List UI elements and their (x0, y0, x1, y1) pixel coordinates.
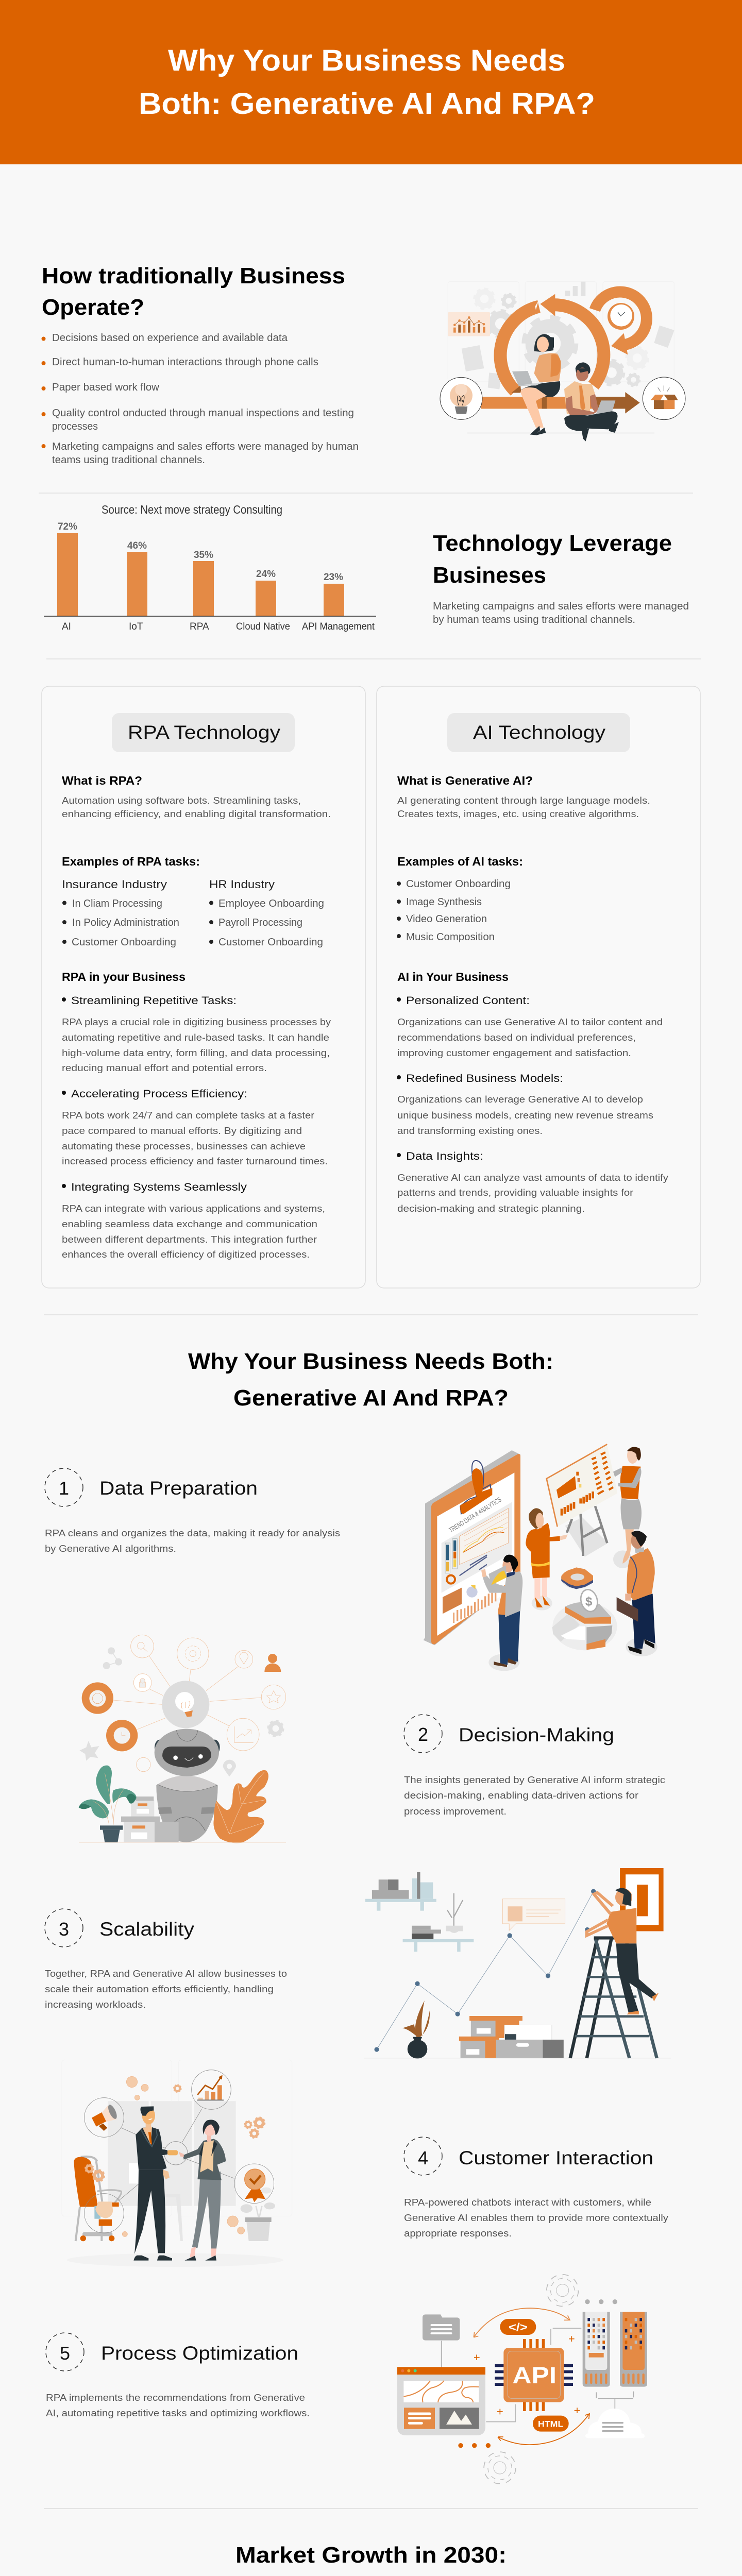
illustration: man on ladder plotting growth (364, 1868, 671, 2059)
clipboard: TREND DATA & ANALYTICS (448, 1496, 503, 1534)
plant pot (241, 2188, 275, 2241)
code pill (500, 2319, 536, 2335)
panel: RPA technology (42, 686, 365, 1288)
RPA in your business (62, 970, 331, 1260)
panel title (447, 713, 630, 752)
RPA in your business: RPA plays a crucial role in digitizing business processes by (62, 1016, 331, 1027)
AI in your business: Generative AI can analyze vast amounts of data to identify (397, 1172, 669, 1183)
number badge (404, 2137, 442, 2175)
examples of AI tasks: Music Composition (406, 931, 495, 943)
standing man with briefcase (617, 1531, 657, 1656)
standing woman centre (526, 1508, 568, 1611)
badge circle: growth chart (192, 2070, 231, 2109)
section: how traditionally business operate (41, 263, 685, 466)
API chip: API (512, 2362, 556, 2388)
badge circle: megaphone (85, 2098, 124, 2137)
paragraph: Marketing campaigns and sales efforts were managed (433, 601, 689, 612)
what is RPA: What is RPA? (62, 774, 142, 787)
panel: AI technology (377, 686, 700, 1288)
line chart (374, 1889, 596, 2052)
chart source: Source: Next move strategy Consulting (102, 503, 282, 516)
step 3: scalability (45, 1909, 287, 2010)
examples of RPA tasks: Examples of RPA tasks: (62, 855, 200, 868)
AI in your business: AI in Your Business (397, 970, 509, 984)
step text (45, 1968, 287, 2010)
RPA in your business: automating repetitive and rule-based tasks. It can handle (62, 1032, 329, 1043)
RPA in your business: Streamlining Repetitive Tasks: (71, 995, 237, 1007)
step text: appropriate responses. (404, 2228, 512, 2239)
number badge (46, 2333, 84, 2371)
step heading: Scalability (99, 1919, 195, 1940)
value labels: 35% (194, 550, 213, 561)
heading: Busineses (433, 563, 546, 588)
ladder and man (570, 1888, 659, 2058)
panel title (112, 713, 295, 752)
AI in your business: Organizations can use Generative AI to tailor content and (397, 1016, 663, 1027)
step text: process improvement. (404, 1806, 507, 1817)
examples of RPA tasks: Payroll Processing (218, 917, 302, 928)
icon: light bulb (440, 377, 482, 419)
connector lines (119, 2109, 234, 2201)
AI in your business: patterns and trends, providing valuable insights for (397, 1187, 633, 1198)
AI in your business: Data Insights: (406, 1150, 483, 1162)
what is RPA: enhancing efficiency, and enabling digital transformation. (62, 808, 331, 819)
examples of AI tasks: Examples of AI tasks: (397, 855, 523, 868)
heading: market growth: Market Growth in 2030: (235, 2543, 507, 2568)
AI in your business: Organizations can leverage Generative AI to develop (397, 1094, 643, 1105)
section: technology leverage businesses (433, 531, 689, 625)
title: Both: Generative AI And RPA? (139, 87, 595, 121)
gear and pie chart: $ (585, 1595, 592, 1609)
what is generative AI: Creates texts, images, etc. using creative algorithms. (397, 808, 639, 819)
step text: RPA implements the recommendations from Generative (46, 2392, 305, 2403)
AI in your business: and transforming existing ones. (397, 1125, 543, 1136)
panel title: RPA Technology (128, 722, 281, 743)
value labels: 23% (324, 572, 343, 583)
plant (79, 1766, 137, 1842)
AI in your business: improving customer engagement and satisfaction. (397, 1047, 631, 1058)
panel title: AI Technology (473, 722, 606, 743)
examples of AI tasks: Customer Onboarding (406, 878, 511, 890)
RPA in your business: between different departments. This integration further (62, 1234, 317, 1245)
RPA in your business: Accelerating Process Efficiency: (71, 1088, 247, 1100)
standing man at board (481, 1555, 522, 1671)
AI in your business: Redefined Business Models: (406, 1073, 563, 1084)
step text: decision-making, enabling data-driven actions for (404, 1790, 638, 1801)
step 1: data preparation (45, 1468, 340, 1554)
step text: AI, automating repetitive tasks and optimizing workflows. (46, 2408, 310, 2418)
step text: Together, RPA and Generative AI allow businesses to (45, 1968, 287, 1979)
heading: why your business needs both (188, 1349, 553, 1411)
server racks (583, 2312, 647, 2387)
what is generative AI: What is Generative AI? (397, 774, 533, 787)
AI in your business: unique business models, creating new revenue streams (397, 1110, 653, 1121)
AI in your business: decision-making and strategic planning. (397, 1203, 585, 1214)
bullet list: Decisions based on experience and available data (52, 332, 288, 344)
RPA in your business: RPA in your Business (62, 970, 185, 984)
clipboard (424, 1450, 520, 1645)
RPA in your business: RPA bots work 24/7 and can complete tasks at a faster (62, 1110, 314, 1121)
frame (620, 1868, 664, 1931)
AI in your business: Personalized Content: (406, 995, 530, 1007)
folder icon (423, 2314, 460, 2341)
badge circle: fist (85, 2194, 124, 2233)
illustration: robot with idea network (79, 1635, 286, 1843)
step text (46, 2392, 310, 2418)
value labels: 24% (256, 569, 276, 580)
AI in your business: recommendations based on individual preferences, (397, 1032, 636, 1043)
heading: why your business needs both: Generative AI And RPA? (233, 1385, 509, 1411)
value labels: 72% (58, 521, 77, 532)
examples of AI tasks (397, 855, 523, 943)
speech box (502, 1899, 565, 1930)
bullet list: Paper based work flow (52, 382, 160, 393)
standing woman right (613, 1447, 642, 1568)
step heading: Process Optimization (101, 2343, 298, 2364)
html pill: HTML (538, 2419, 563, 2429)
what is RPA (62, 774, 331, 819)
browser window (397, 2367, 485, 2435)
RPA in your business: enhances the overall efficiency of digitized processes. (62, 1249, 310, 1260)
examples of AI tasks: Image Synthesis (406, 896, 482, 908)
paragraph: by human teams using traditional channels. (433, 614, 635, 625)
step 5: process optimization (46, 2333, 310, 2418)
illustration: API hub (397, 2277, 647, 2482)
value labels: 46% (127, 540, 147, 551)
plus signs (474, 2336, 580, 2414)
number badge: 1 (59, 1478, 69, 1499)
woman with laptop (512, 334, 561, 435)
API chip (495, 2339, 573, 2411)
header banner (0, 0, 742, 164)
examples of AI tasks: Video Generation (406, 913, 487, 925)
what is generative AI: AI generating content through large language models. (397, 795, 650, 806)
outline gears (486, 2277, 576, 2482)
bars (57, 533, 344, 616)
RPA in your business: high-volume data entry, form filling, and data processing, (62, 1047, 330, 1058)
flow arrows (474, 2308, 589, 2445)
step 2: decision-making (404, 1715, 665, 1817)
step text: The insights generated by Generative AI inform strategic (404, 1774, 665, 1785)
step text: RPA-powered chatbots interact with customers, while (404, 2197, 651, 2208)
office chair (74, 2157, 122, 2241)
examples of RPA tasks: In Cliam Processing (72, 898, 162, 909)
examples of RPA tasks: In Policy Administration (72, 917, 179, 928)
title (139, 44, 595, 121)
icon: open box (643, 377, 685, 420)
examples of RPA tasks (62, 855, 324, 948)
category labels: API Management (302, 621, 375, 632)
step text (404, 2197, 669, 2239)
step text: RPA cleans and organizes the data, making it ready for analysis (45, 1528, 340, 1538)
step text (45, 1528, 340, 1554)
bullet list: Marketing campaigns and sales efforts were managed by human (52, 441, 359, 452)
category labels: IoT (129, 621, 143, 632)
coins (122, 2076, 245, 2236)
what is generative AI (397, 774, 650, 819)
value labels (58, 521, 343, 583)
code pill: </> (509, 2320, 528, 2333)
cloud icon (585, 2409, 645, 2438)
heading (433, 531, 672, 588)
step heading: Data Preparation (99, 1478, 258, 1499)
bar chart: technology adoption (44, 503, 376, 632)
man in suit (133, 2106, 178, 2261)
step text (404, 1774, 665, 1817)
number badge (45, 1468, 83, 1506)
RPA in your business: increased process efficiency and faster turnaround times. (62, 1156, 328, 1166)
RPA in your business: enabling seamless data exchange and communication (62, 1218, 317, 1229)
man with laptop (564, 362, 619, 442)
category labels: RPA (190, 621, 209, 632)
illustration: workflow cycle with two people (440, 282, 685, 442)
RPA in your business: Integrating Systems Seamlessly (71, 1181, 247, 1193)
AI in your business (397, 970, 669, 1214)
bullet list: Quality control onducted through manual inspections and testing (52, 408, 354, 419)
heading: How traditionally Business (42, 263, 345, 289)
examples of RPA tasks: Employee Onboarding (218, 898, 324, 909)
number badge: 3 (59, 1919, 69, 1940)
category labels: AI (62, 621, 71, 632)
connectors (442, 2328, 633, 2422)
step text: by Generative AI algorithms. (45, 1543, 176, 1554)
shelves (365, 1872, 474, 1952)
heading (42, 263, 345, 320)
examples of RPA tasks: Customer Onboarding (218, 937, 323, 948)
number badge: 4 (418, 2147, 428, 2168)
title: Why Your Business Needs (168, 44, 565, 77)
number badge (404, 1715, 442, 1753)
bullet list: Direct human-to-human interactions through phone calls (52, 357, 318, 368)
category labels (62, 621, 375, 632)
orange rings and person icon (82, 1654, 281, 1751)
examples of RPA tasks: HR Industry (209, 878, 275, 891)
number badge: 5 (60, 2343, 70, 2364)
number badge: 2 (418, 1724, 428, 1745)
step text: Generative AI enables them to provide more contextually (404, 2212, 669, 2223)
RPA in your business: pace compared to manual efforts. By digitizing and (62, 1125, 302, 1136)
storage boxes (459, 2016, 564, 2058)
boxes (121, 1797, 179, 1842)
step heading: Customer Interaction (459, 2147, 653, 2168)
illustration: isometric analytics clipboard team (424, 1444, 657, 1671)
presenter board (547, 1444, 617, 1557)
html pill (533, 2416, 569, 2432)
orange leaf (213, 1770, 268, 1843)
step text: increasing workloads. (45, 1999, 146, 2010)
category labels: Cloud Native (236, 621, 290, 632)
grey icons (79, 1647, 236, 1776)
woman in suit (179, 2120, 226, 2261)
examples of RPA tasks: Insurance Industry (62, 878, 167, 891)
badge circle: award (234, 2164, 274, 2204)
what is RPA: Automation using software bots. Streamlining tasks, (62, 795, 301, 806)
examples of RPA tasks: Customer Onboarding (72, 937, 176, 948)
heading: why your business needs both: Why Your Business Needs Both: (188, 1349, 553, 1374)
bullet list (41, 332, 359, 466)
idea bulb (162, 1681, 209, 1728)
RPA in your business: reducing manual effort and potential errors. (62, 1062, 267, 1073)
RPA in your business: automating these processes, businesses can achieve (62, 1141, 306, 1151)
gear and pie chart (552, 1567, 617, 1650)
plant vase (402, 2001, 430, 2059)
RPA in your business: RPA can integrate with various applications and systems, (62, 1203, 325, 1214)
step heading: Decision-Making (459, 1724, 614, 1745)
heading: Operate? (42, 295, 144, 320)
bullet list: teams using traditional channels. (52, 454, 205, 466)
heading: Technology Leverage (433, 531, 672, 556)
number badge (45, 1909, 83, 1947)
paragraph (433, 601, 689, 625)
step 4: customer interaction (404, 2137, 669, 2239)
robot (155, 1729, 220, 1842)
bullet list: processes (52, 421, 98, 432)
step text: scale their automation efforts efficiently, handling (45, 1984, 274, 1994)
illustration: business handshake (62, 2060, 292, 2267)
